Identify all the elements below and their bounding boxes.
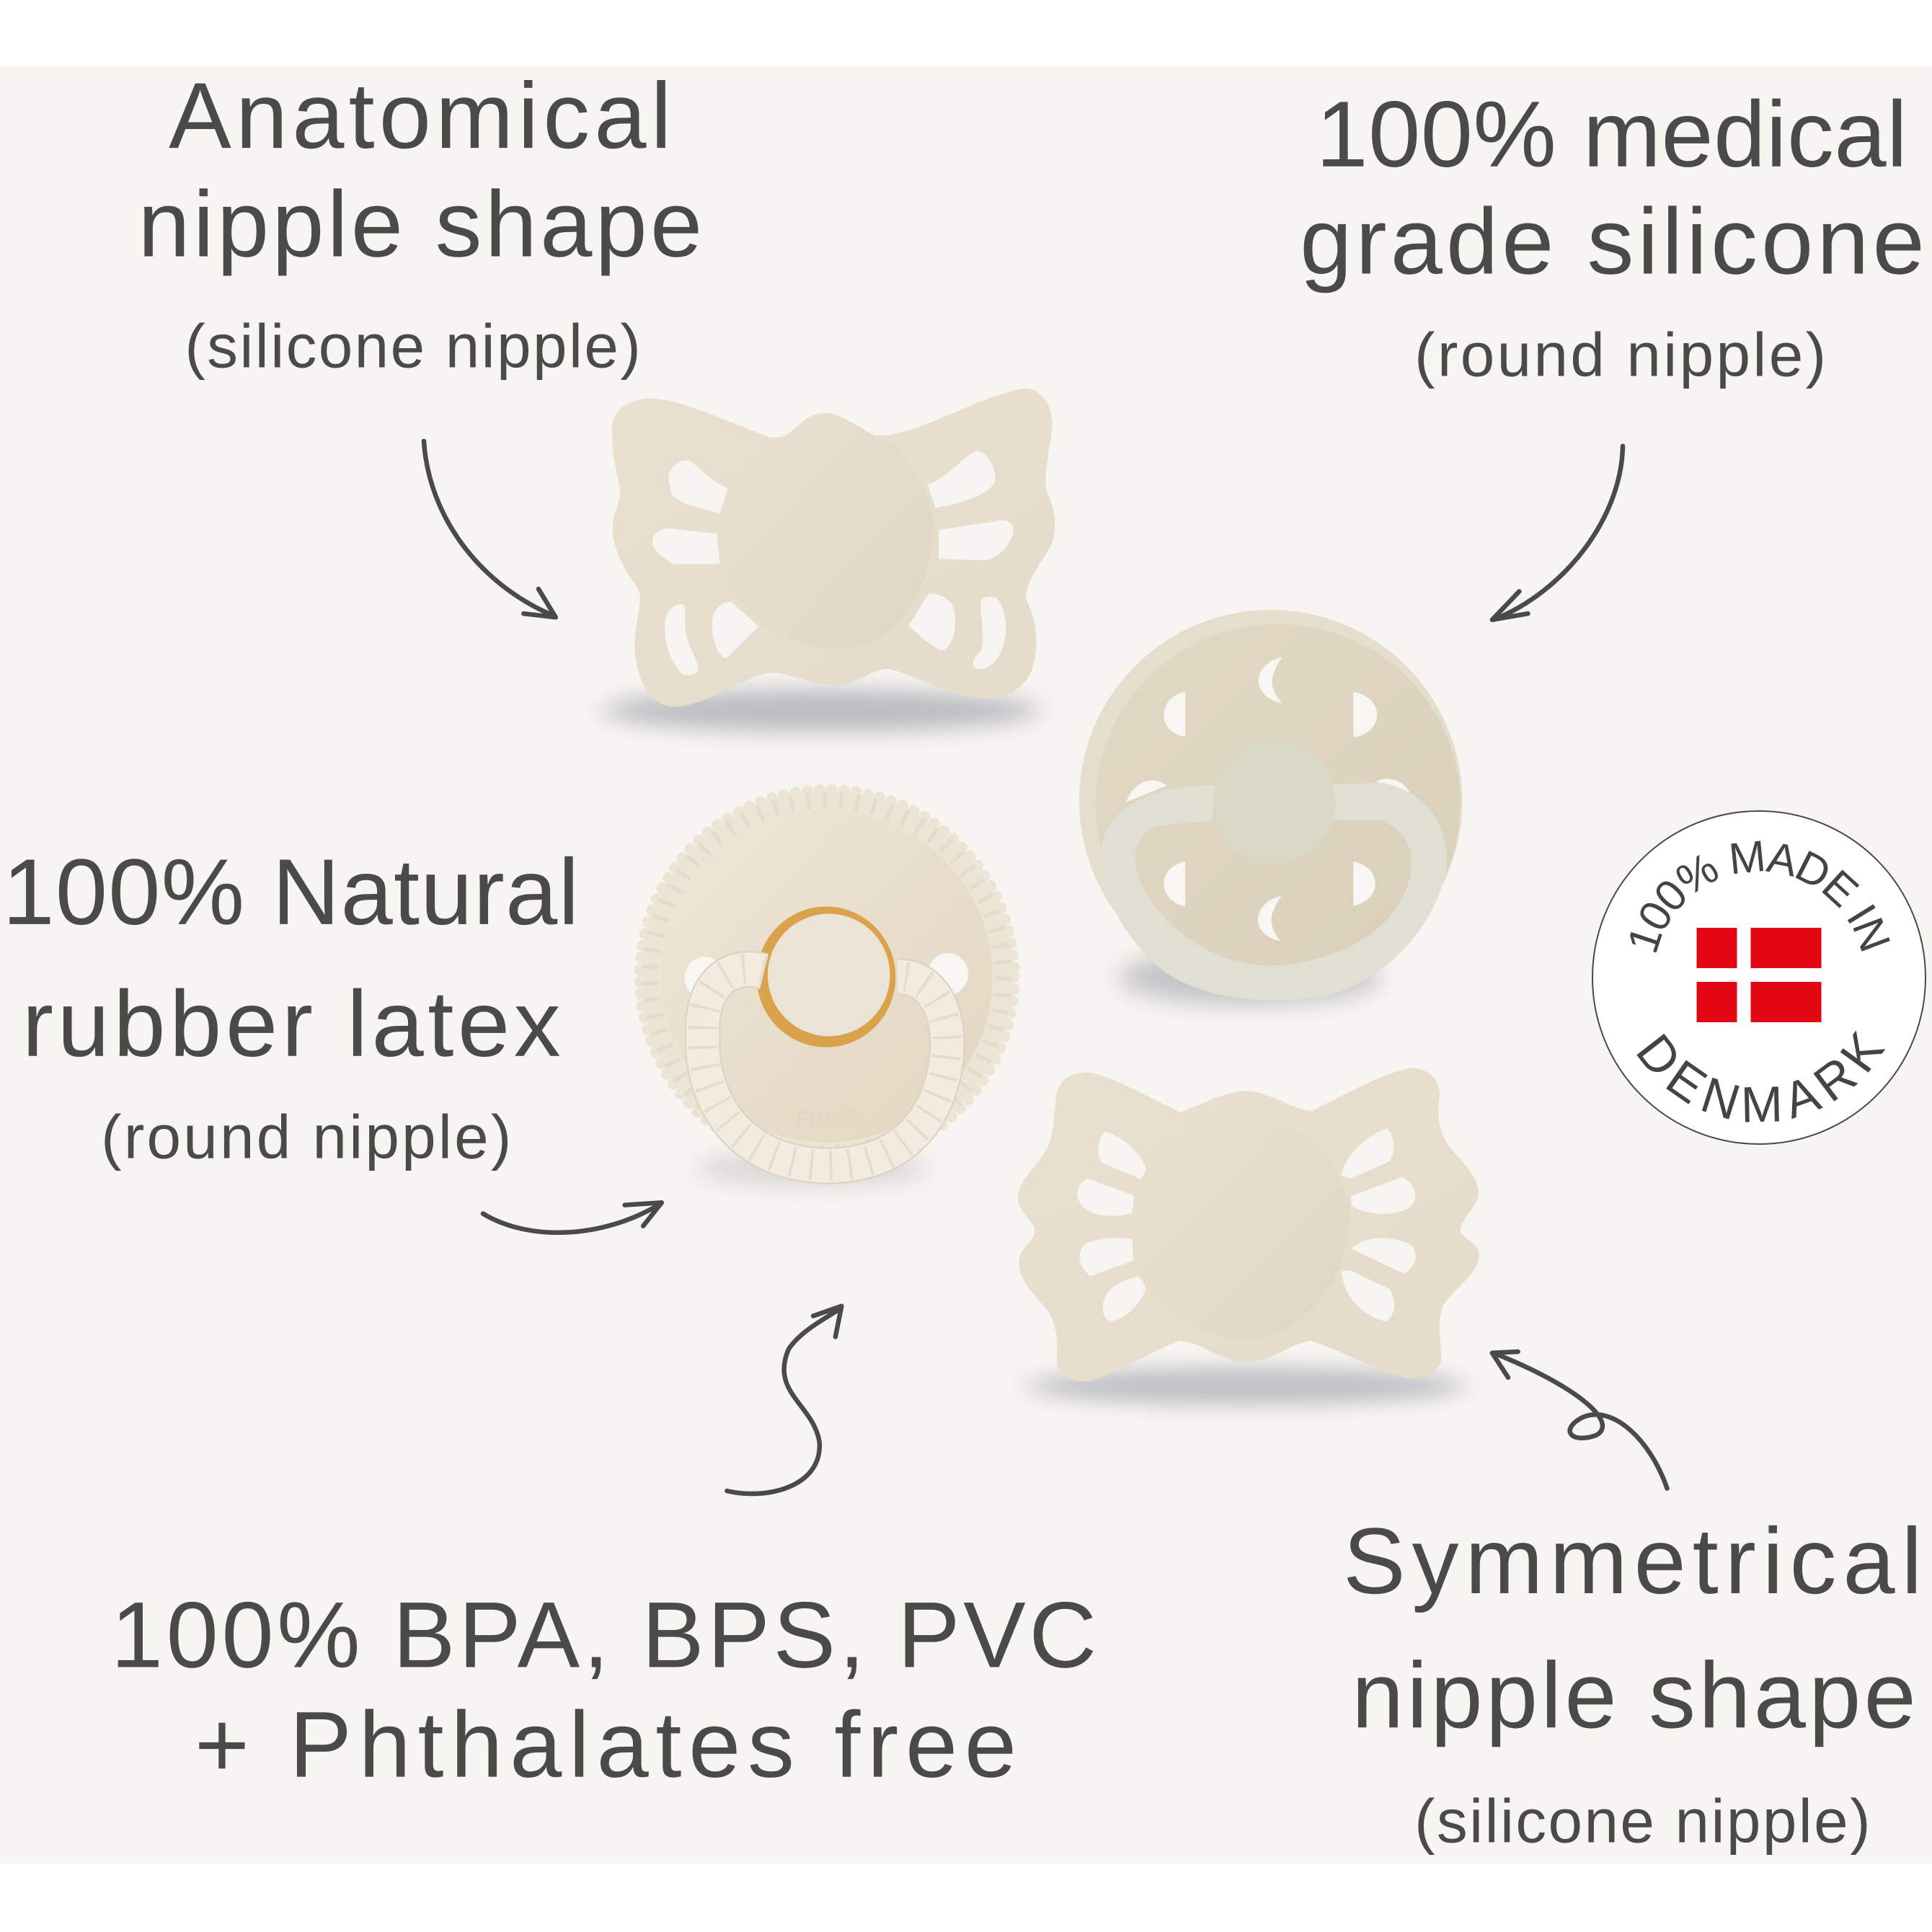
pacifier: rope rubber latex (640, 790, 1014, 1185)
callout: anatomical nipple shape: Anatomical (169, 63, 672, 168)
arrow: to rope pacifier (483, 1202, 662, 1233)
callout: medical grade silicone (1300, 81, 1925, 389)
pacifier: moon round silicone (1079, 610, 1462, 1005)
callout: medical grade silicone: grade silicone (1300, 188, 1925, 293)
callout: symmetrical nipple shape (1343, 1508, 1922, 1856)
callout: BPA free (111, 1582, 1096, 1797)
callout: BPA free: 100% BPA, BPS, PVC (111, 1582, 1096, 1688)
arrow: to anatomical pacifier (424, 441, 556, 617)
callout: symmetrical nipple shape: Symmetrical (1343, 1508, 1922, 1613)
badge: 100% made in Denmark (1592, 810, 1926, 1145)
callout: anatomical nipple shape (138, 63, 702, 381)
pacifier: anatomical butterfly (603, 389, 1055, 732)
callout: anatomical nipple shape: (silicone nipple) (185, 312, 641, 381)
callout: medical grade silicone: 100% medical (1316, 81, 1907, 187)
callout: natural rubber latex: 100% Natural (2, 839, 579, 944)
callout: natural rubber latex (2, 839, 579, 1172)
danish flag (1697, 928, 1821, 1022)
callout: medical grade silicone: (round nipple) (1414, 321, 1826, 389)
rope handle (703, 970, 947, 1166)
callout: symmetrical nipple shape: (silicone nipple) (1414, 1787, 1871, 1856)
callout: symmetrical nipple shape: nipple shape (1352, 1642, 1916, 1747)
callout: natural rubber latex: rubber latex (22, 971, 561, 1076)
arrow: BPA free squiggle (727, 1306, 841, 1494)
callout: natural rubber latex: (round nipple) (101, 1104, 511, 1172)
callout: BPA free: + Phthalates free (195, 1692, 1016, 1797)
arrow: to symmetrical pacifier (1492, 1352, 1667, 1489)
rope rim and shield (640, 790, 1014, 1164)
pacifier: symmetrical butterfly (1018, 1068, 1479, 1405)
callout: anatomical nipple shape: nipple shape (138, 172, 702, 277)
pacifier: rope rubber latex: FRIGG (796, 1107, 864, 1131)
badge: 100% made in Denmark: 100% MADE IN (1630, 841, 1890, 953)
arrow: to moon pacifier (1492, 446, 1623, 620)
badge: 100% made in Denmark: DENMARK (1636, 1030, 1886, 1122)
